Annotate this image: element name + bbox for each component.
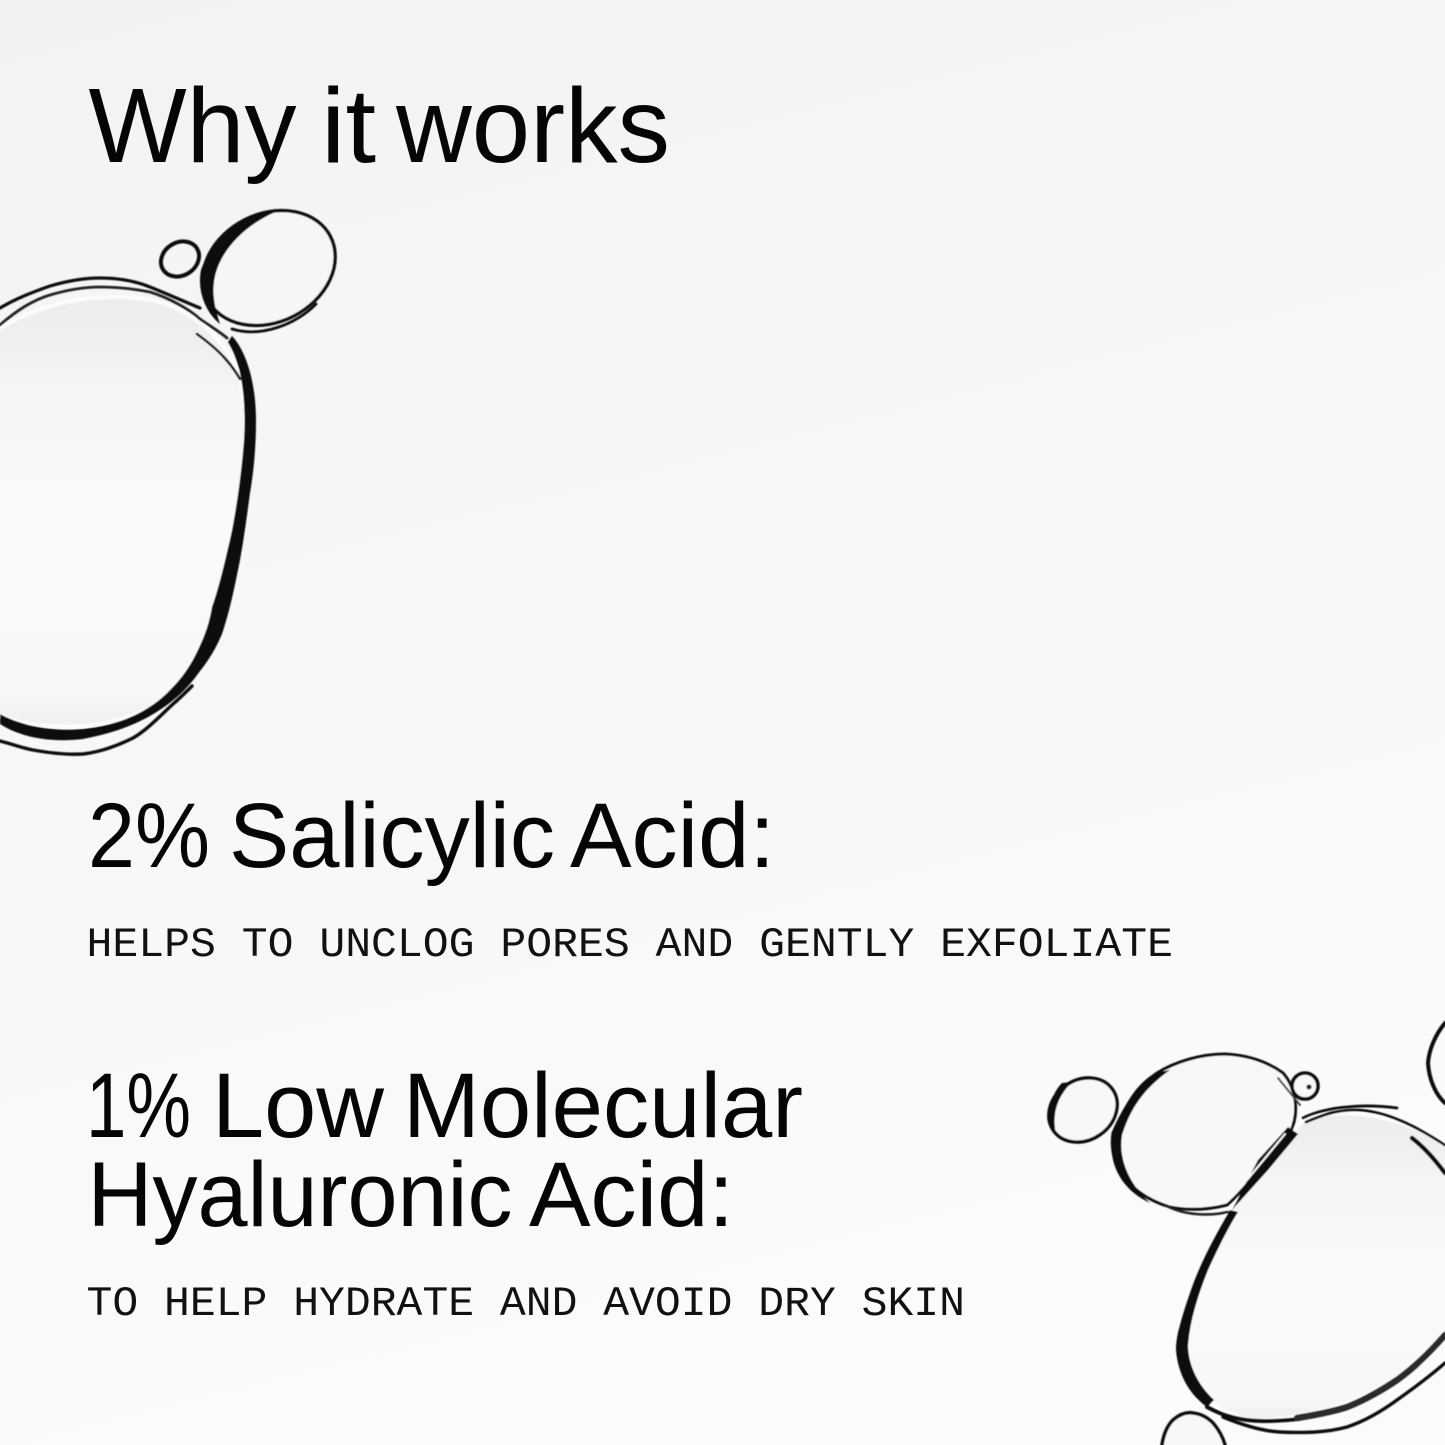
title: it: [321, 67, 376, 185]
heading: salicylic acid: Salicylic: [229, 785, 555, 887]
heading: hyaluronic acid: Hyaluronic: [88, 1144, 512, 1246]
heading: hyaluronic acid: [86, 1055, 803, 1246]
band between bubbles: [1232, 1127, 1298, 1210]
description: salicylic acid: HELPS TO UNCLOG PORES AND GENTLY EXFOLIATE: [86, 921, 1173, 969]
title: works: [395, 67, 670, 185]
title: Why: [88, 67, 296, 185]
bubbles: top left cluster: [0, 189, 355, 754]
bubble: small top left: [154, 234, 206, 284]
heading: hyaluronic acid: Molecular: [403, 1055, 803, 1157]
bubble: tiny lower: [1292, 1073, 1318, 1099]
bubble: bottom partial: [1162, 1413, 1225, 1445]
heading: salicylic acid: [88, 785, 775, 887]
bubble: small lower: [1036, 1065, 1130, 1155]
bubble: large lower: [1176, 1210, 1238, 1407]
bubble: medium lower: [1112, 1054, 1296, 1209]
title: [88, 67, 670, 185]
heading: hyaluronic acid: Low: [212, 1055, 385, 1157]
bubble: medium top left: [183, 189, 355, 347]
heading: salicylic acid: 2%: [88, 785, 210, 887]
bubbles: bottom right cluster: [1036, 1023, 1445, 1445]
description: hyaluronic acid: TO HELP HYDRATE AND AVOID DRY SKIN: [86, 1280, 965, 1328]
bubble: right edge partial: [1428, 1023, 1445, 1103]
heading: hyaluronic acid: Acid:: [529, 1144, 734, 1246]
heading: salicylic acid: Acid:: [570, 785, 775, 887]
heading: hyaluronic acid: 1%: [86, 1055, 191, 1157]
